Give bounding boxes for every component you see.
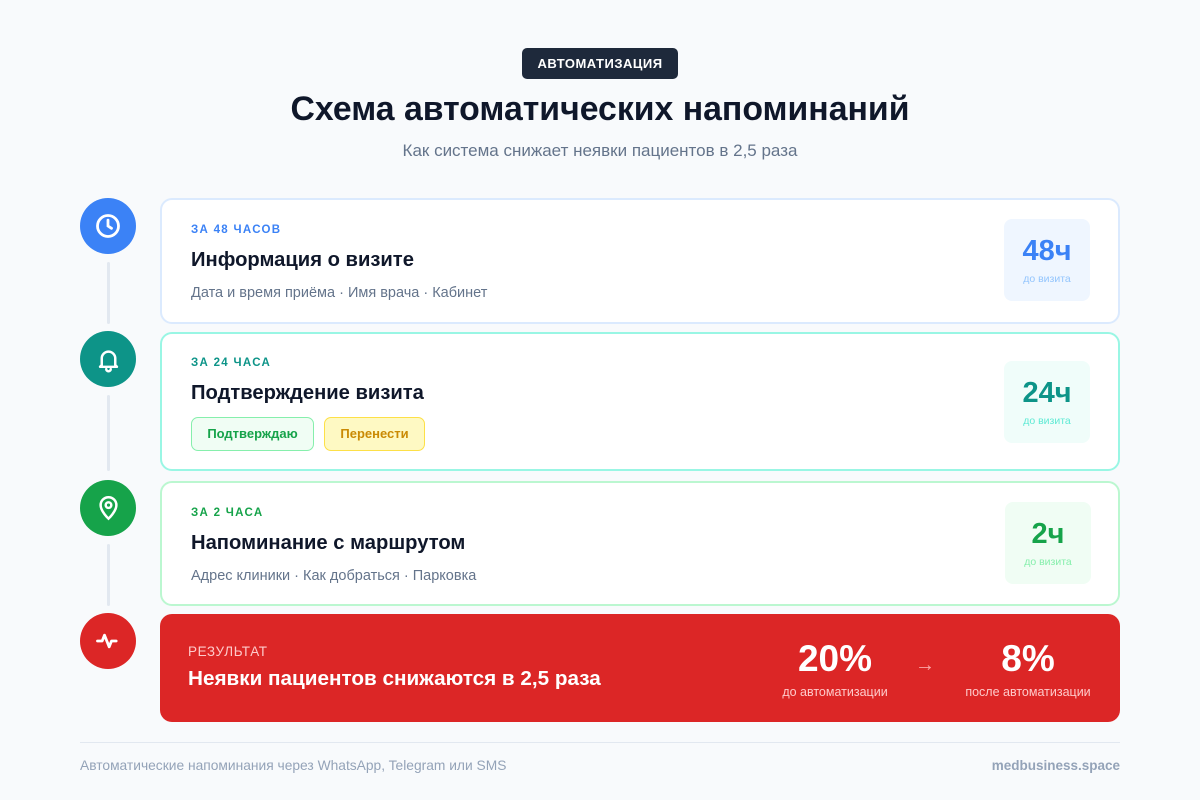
panel: result: РЕЗУЛЬТАТ: [188, 644, 268, 659]
panel: 24h: 24ч: [1022, 377, 1072, 409]
panel: 2h: до визита: [1024, 556, 1072, 568]
footer brand: medbusiness.space: [992, 758, 1120, 773]
badge: АВТОМАТИЗАЦИЯ: [537, 56, 663, 71]
stat: before: [782, 638, 888, 699]
panel: 24h: ЗА 24 ЧАСА: [191, 357, 271, 369]
stat: before: 20%: [798, 638, 872, 679]
title: Схема автоматических напоминаний: [290, 90, 910, 128]
icon: map pin: [80, 480, 136, 536]
icon: clock: [80, 198, 136, 254]
panel: 48h: Информация о визите: [191, 249, 414, 271]
stat: after: 8%: [1001, 638, 1055, 679]
stat: after: после автоматизации: [965, 685, 1091, 699]
panel: 2h: Напоминание с маршрутом: [191, 532, 465, 554]
panel: 24h: Подтверждение визита: [191, 382, 424, 404]
panel: result: Неявки пациентов снижаются в 2,5 раза: [188, 667, 601, 690]
subtitle: Как система снижает неявки пациентов в 2,5 раза: [403, 141, 797, 160]
panel: 48h: 48ч: [1022, 235, 1072, 267]
panel: result: [160, 614, 1120, 722]
footer text: Автоматические напоминания через WhatsApp, Telegram или SMS: [80, 758, 506, 773]
panel: 2h: ЗА 2 ЧАСА: [191, 507, 263, 519]
panel: 48h: Дата и время приёма · Имя врача · Кабинет: [191, 285, 487, 301]
arrow: →: [915, 654, 935, 676]
stat: before: до автоматизации: [782, 685, 888, 699]
panel: 24h: [160, 332, 1120, 471]
panel: 2h: Адрес клиники · Как добраться · Парковка: [191, 568, 476, 584]
panel: 24h: до визита: [1023, 415, 1071, 427]
stat: after: [965, 638, 1091, 699]
panel: 48h: до визита: [1023, 273, 1071, 285]
icon: pulse: [80, 613, 136, 669]
panel: 48h: [160, 198, 1120, 324]
panel: 24h: Подтверждаю: [207, 426, 298, 441]
panel: 24h: Перенести: [340, 426, 409, 441]
panel: 2h: 2ч: [1032, 518, 1064, 550]
panel: 2h: [160, 481, 1120, 606]
icon: bell: [80, 331, 136, 387]
panel: 48h: ЗА 48 ЧАСОВ: [191, 224, 281, 236]
badge: [522, 48, 678, 79]
